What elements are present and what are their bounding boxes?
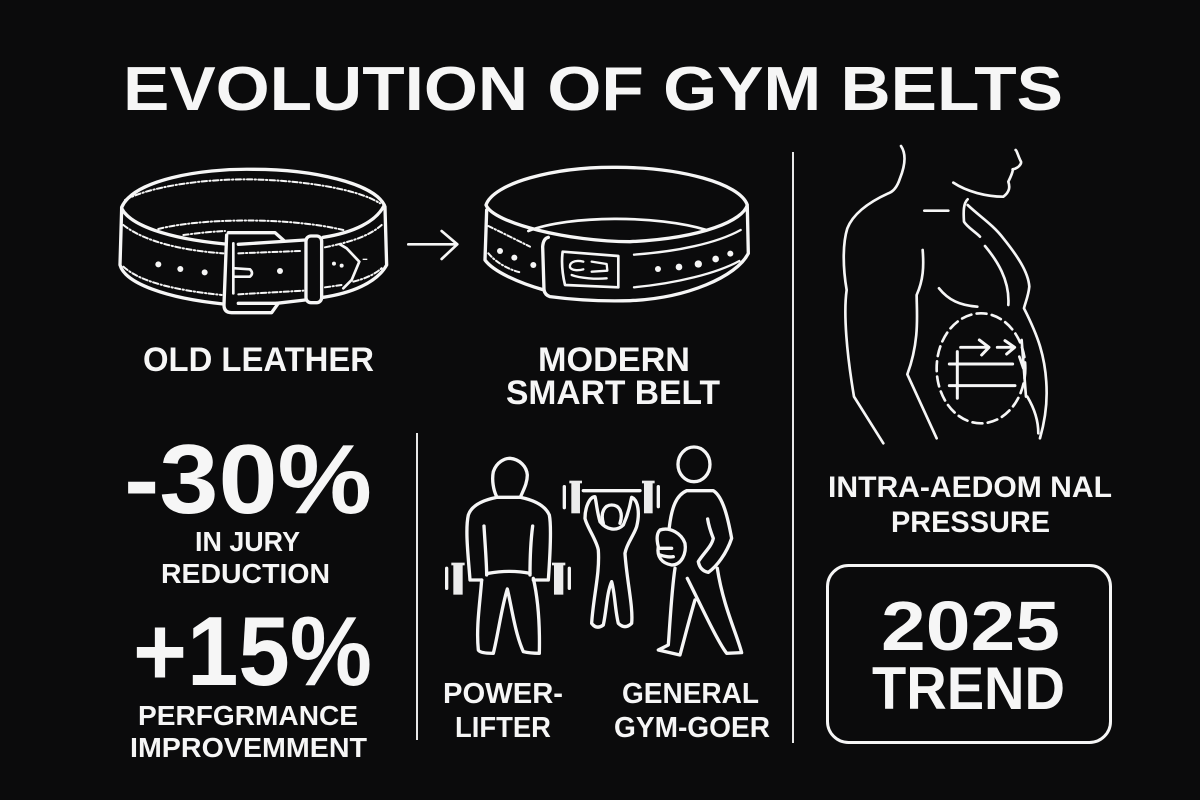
label: modern smart belt: MODERN (538, 341, 690, 379)
stat: injury reduction: IN JURY (195, 526, 300, 557)
label: modern smart belt: SMART BELT (506, 374, 720, 412)
stat: performance improvement: IMPROVEMMENT (130, 732, 367, 763)
icon: old leather belt (120, 169, 387, 313)
stat: performance improvement: PERFGRMANCE (138, 700, 358, 731)
label: powerlifter: LIFTER (455, 712, 551, 744)
callout: 2025 trend: 2025 (881, 587, 1060, 665)
callout: 2025 trend (828, 566, 1110, 742)
label: general gym-goer: GENERAL (622, 678, 759, 710)
stat: performance improvement: +15% (133, 596, 372, 706)
stat: injury reduction (124, 424, 372, 589)
stat: performance improvement (130, 596, 372, 763)
label: modern smart belt (506, 341, 720, 412)
label: intra-abdominal pressure: PRESSURE (891, 506, 1050, 539)
label: powerlifter (443, 678, 563, 744)
label: intra-abdominal pressure (828, 471, 1112, 539)
title: EVOLUTION OF GYM BELTS (123, 55, 1063, 124)
icon: powerlifter with dumbbells (447, 458, 569, 653)
stat: injury reduction: -30% (124, 424, 372, 534)
icon: modern smart belt (485, 167, 748, 301)
icon: overhead lifter (564, 481, 658, 627)
label: general gym-goer: GYM-GOER (614, 712, 770, 744)
label: powerlifter: POWER- (443, 678, 563, 710)
icon: general gym-goer (657, 447, 742, 655)
label: old leather: OLD LEATHER (143, 341, 374, 379)
label: intra-abdominal pressure: INTRA-AEDOM NAL (828, 471, 1112, 504)
arrow: old to modern (408, 231, 457, 259)
stat: injury reduction: REDUCTION (161, 558, 330, 589)
icon: torso with abdominal pressure (844, 146, 1047, 443)
callout: 2025 trend: TREND (872, 655, 1065, 722)
label: general gym-goer (614, 678, 770, 744)
